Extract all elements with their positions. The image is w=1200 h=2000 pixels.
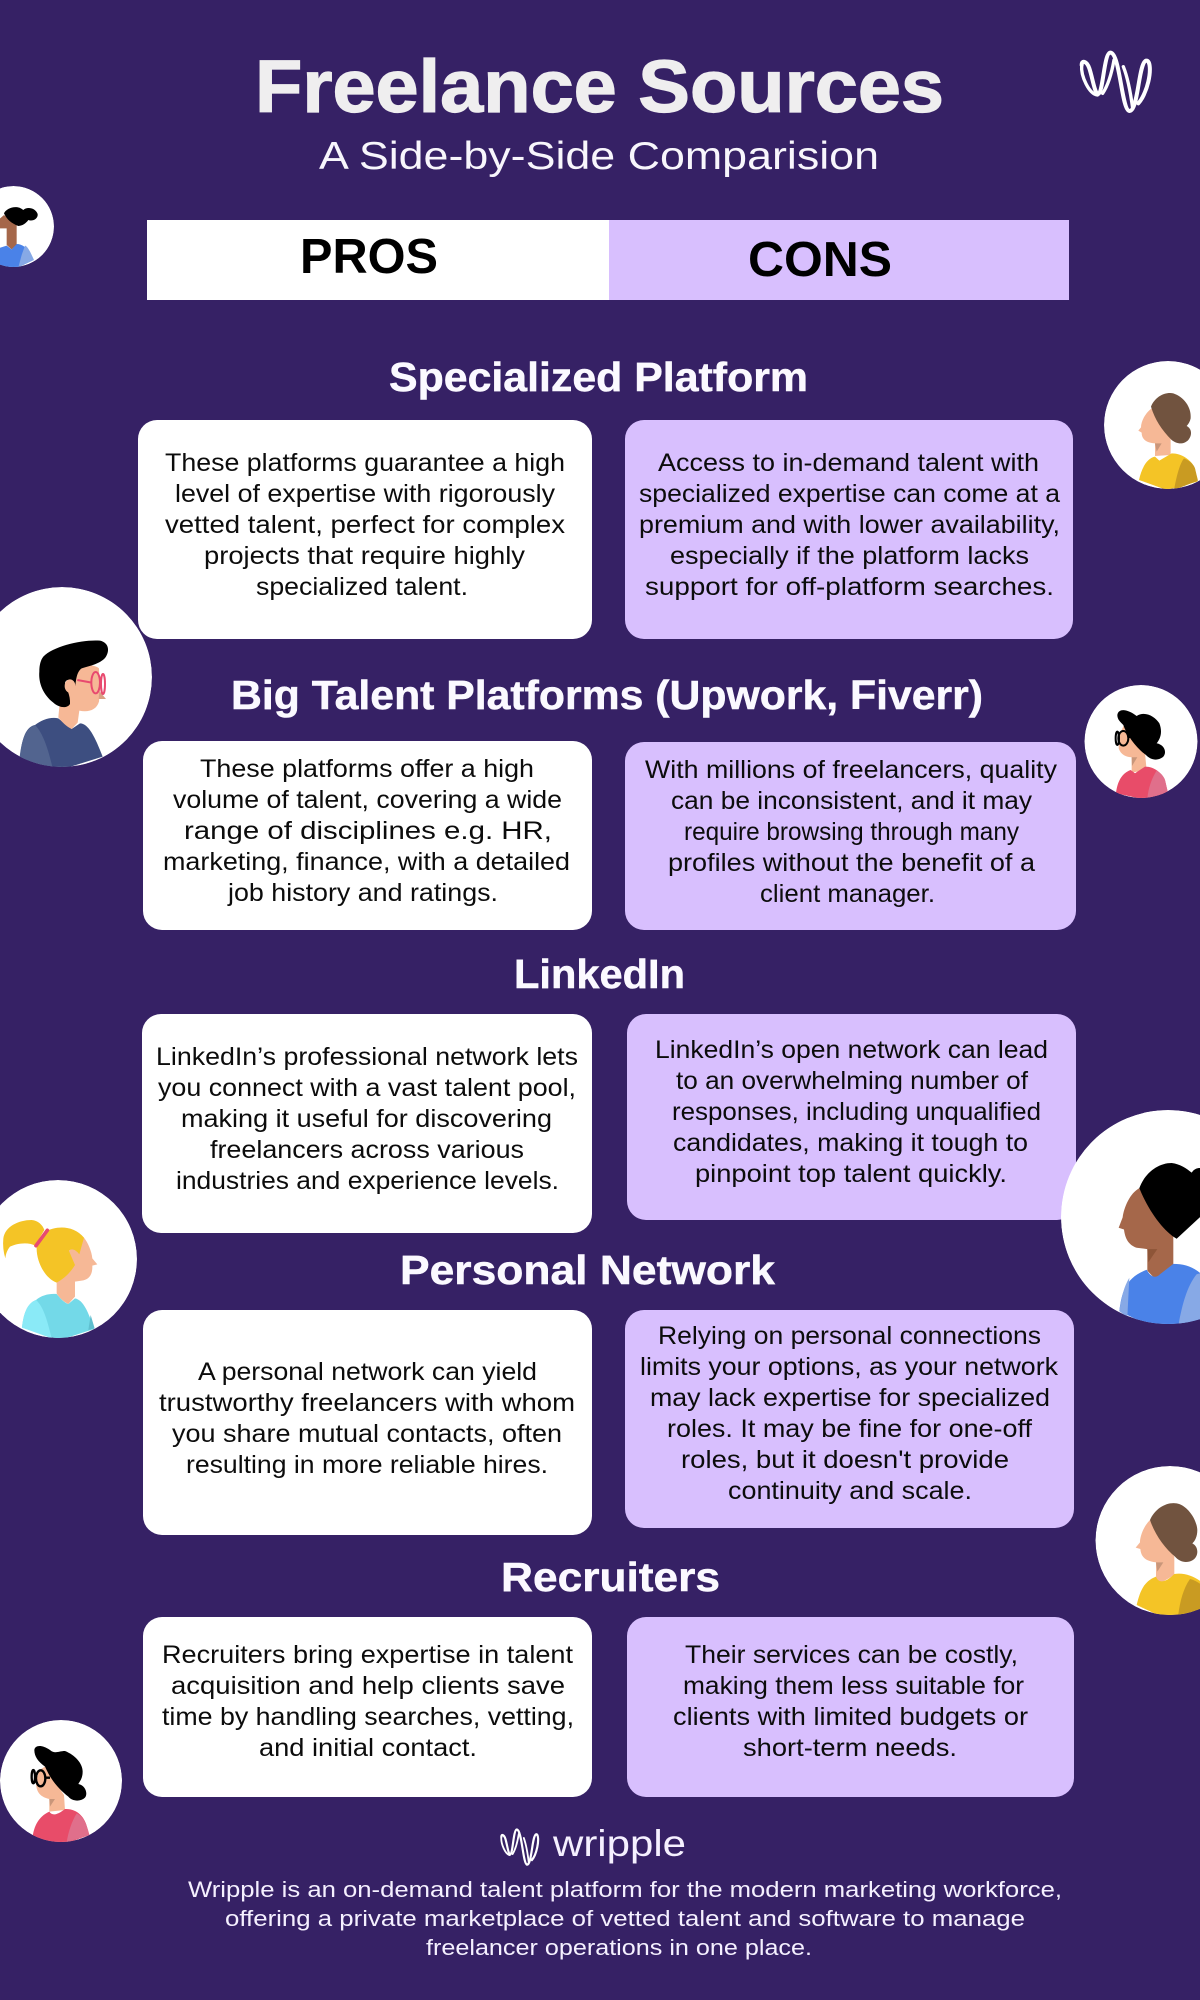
pros card: resulting in more reliable hires. <box>186 1451 548 1479</box>
footer description: Wripple is an on-demand talent platform for the modern marketing workforce, <box>188 1877 1062 1902</box>
icon: avatar woman with black hair and glasses, lower left <box>0 1720 122 1846</box>
pros card: range of disciplines e.g. HR, <box>184 817 552 845</box>
icon: avatar woman with brown bun, lower right <box>1096 1466 1200 1618</box>
cons card <box>627 1617 1074 1797</box>
pros card <box>143 1617 592 1797</box>
cons header <box>609 220 1069 300</box>
heading: LinkedIn <box>514 951 685 997</box>
footer wordmark: wripple <box>552 1823 686 1864</box>
icon: footer wripple logo <box>501 1830 538 1865</box>
cons card: pinpoint top talent quickly. <box>695 1160 1007 1188</box>
footer description <box>188 1877 1062 1960</box>
pros card <box>143 1310 592 1535</box>
pros card: freelancers across various <box>210 1136 524 1164</box>
footer description: freelancer operations in one place. <box>426 1935 812 1960</box>
cons header: CONS <box>748 233 892 287</box>
icon: avatar woman with brown bun, upper right <box>1104 361 1200 490</box>
pros header: PROS <box>300 230 438 284</box>
icon: wripple logo <box>1082 53 1150 111</box>
cons card: clients with limited budgets or <box>673 1703 1028 1731</box>
pros card: projects that require highly <box>204 542 526 570</box>
icon: avatar woman with black hair and glasses, right <box>1084 685 1198 799</box>
pros card: LinkedIn’s professional network lets <box>156 1043 578 1071</box>
cons card: With millions of freelancers, quality <box>645 756 1058 784</box>
panel: specialized platform <box>138 354 1073 639</box>
pros card: industries and experience levels. <box>176 1167 559 1195</box>
title: Freelance Sources <box>255 45 944 128</box>
cons card: can be inconsistent, and it may <box>671 787 1033 815</box>
comparison header <box>147 220 1069 300</box>
heading: Specialized Platform <box>389 354 808 400</box>
icon: avatar woman with dark bun, top left <box>0 186 54 267</box>
cons card: Relying on personal connections <box>658 1322 1041 1350</box>
cons card: support for off-platform searches. <box>645 573 1054 601</box>
pros card: marketing, finance, with a detailed <box>163 848 570 876</box>
subtitle: A Side-by-Side Comparision <box>319 135 879 178</box>
pros card: vetted talent, perfect for complex <box>165 511 566 539</box>
cons card: profiles without the benefit of a <box>668 849 1035 877</box>
pros card: job history and ratings. <box>227 879 498 907</box>
cons card: require browsing through many <box>684 818 1019 846</box>
pros card: you connect with a vast talent pool, <box>158 1074 576 1102</box>
pros card: and initial contact. <box>259 1734 477 1762</box>
cons card: to an overwhelming number of <box>676 1067 1028 1095</box>
cons card: responses, including unqualified <box>672 1098 1041 1126</box>
heading: Big Talent Platforms (Upwork, Fiverr) <box>231 672 983 718</box>
cons card: may lack expertise for specialized <box>650 1384 1050 1412</box>
cons card: roles, but it doesn't provide <box>681 1446 1009 1474</box>
cons card: especially if the platform lacks <box>670 542 1029 570</box>
cons card <box>625 1310 1074 1528</box>
panel: linkedin <box>142 951 1076 1233</box>
panel: personal network <box>143 1247 1074 1535</box>
pros card: Recruiters bring expertise in talent <box>162 1641 573 1669</box>
cons card: Their services can be costly, <box>685 1641 1018 1669</box>
pros card <box>143 741 592 930</box>
icon: avatar woman with blonde ponytail <box>0 1180 137 1340</box>
cons card: candidates, making it tough to <box>673 1129 1028 1157</box>
pros card: you share mutual contacts, often <box>172 1420 562 1448</box>
pros card: making it useful for discovering <box>181 1105 552 1133</box>
panel: big talent platforms <box>143 672 1076 930</box>
footer <box>188 1823 1062 1960</box>
cons card: LinkedIn’s open network can lead <box>655 1036 1048 1064</box>
panel: recruiters <box>143 1554 1074 1797</box>
cons card: Access to in-demand talent with <box>658 449 1039 477</box>
pros header <box>147 220 609 300</box>
pros card: A personal network can yield <box>198 1358 537 1386</box>
cons card: short-term needs. <box>743 1734 957 1762</box>
pros card: level of expertise with rigorously <box>175 480 556 508</box>
cons card <box>625 420 1073 639</box>
pros card: These platforms offer a high <box>200 755 534 783</box>
cons card: roles. It may be fine for one-off <box>667 1415 1032 1443</box>
icon: avatar woman with black hair, large right <box>1061 1110 1200 1328</box>
cons card: premium and with lower availability, <box>639 511 1060 539</box>
cons card: client manager. <box>760 880 935 908</box>
heading: Personal Network <box>400 1247 775 1293</box>
cons card <box>627 1014 1076 1220</box>
icon: avatar man with glasses <box>0 587 152 770</box>
pros card: acquisition and help clients save <box>171 1672 565 1700</box>
pros card <box>138 420 592 639</box>
pros card: trustworthy freelancers with whom <box>159 1389 575 1417</box>
pros card: specialized talent. <box>256 573 468 601</box>
pros card: volume of talent, covering a wide <box>173 786 562 814</box>
cons card: continuity and scale. <box>728 1477 972 1505</box>
heading: Recruiters <box>501 1554 720 1600</box>
cons card: making them less suitable for <box>683 1672 1024 1700</box>
cons card: specialized expertise can come at a <box>639 480 1060 508</box>
footer description: offering a private marketplace of vetted talent and software to manage <box>225 1906 1025 1931</box>
pros card <box>142 1014 592 1233</box>
cons card <box>625 742 1076 930</box>
pros card: These platforms guarantee a high <box>165 449 565 477</box>
pros card: time by handling searches, vetting, <box>162 1703 574 1731</box>
cons card: limits your options, as your network <box>640 1353 1059 1381</box>
